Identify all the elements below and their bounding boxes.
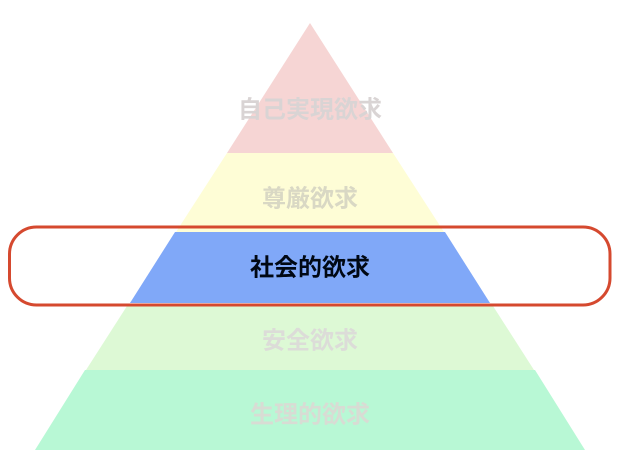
label: safety: 安全欲求 bbox=[262, 328, 358, 354]
tier: physiological bbox=[35, 370, 585, 450]
label: social: 社会的欲求 bbox=[250, 254, 370, 282]
label: esteem: 尊厳欲求 bbox=[262, 186, 358, 212]
label: self-actualization: 自己実現欲求 bbox=[238, 96, 382, 124]
tier: esteem bbox=[176, 153, 444, 232]
tier: social (highlighted) bbox=[130, 232, 490, 303]
label: physiological: 生理的欲求 bbox=[250, 402, 370, 428]
highlight frame bbox=[10, 227, 610, 305]
tier: self-actualization bbox=[227, 23, 393, 153]
tier: safety bbox=[86, 306, 534, 370]
